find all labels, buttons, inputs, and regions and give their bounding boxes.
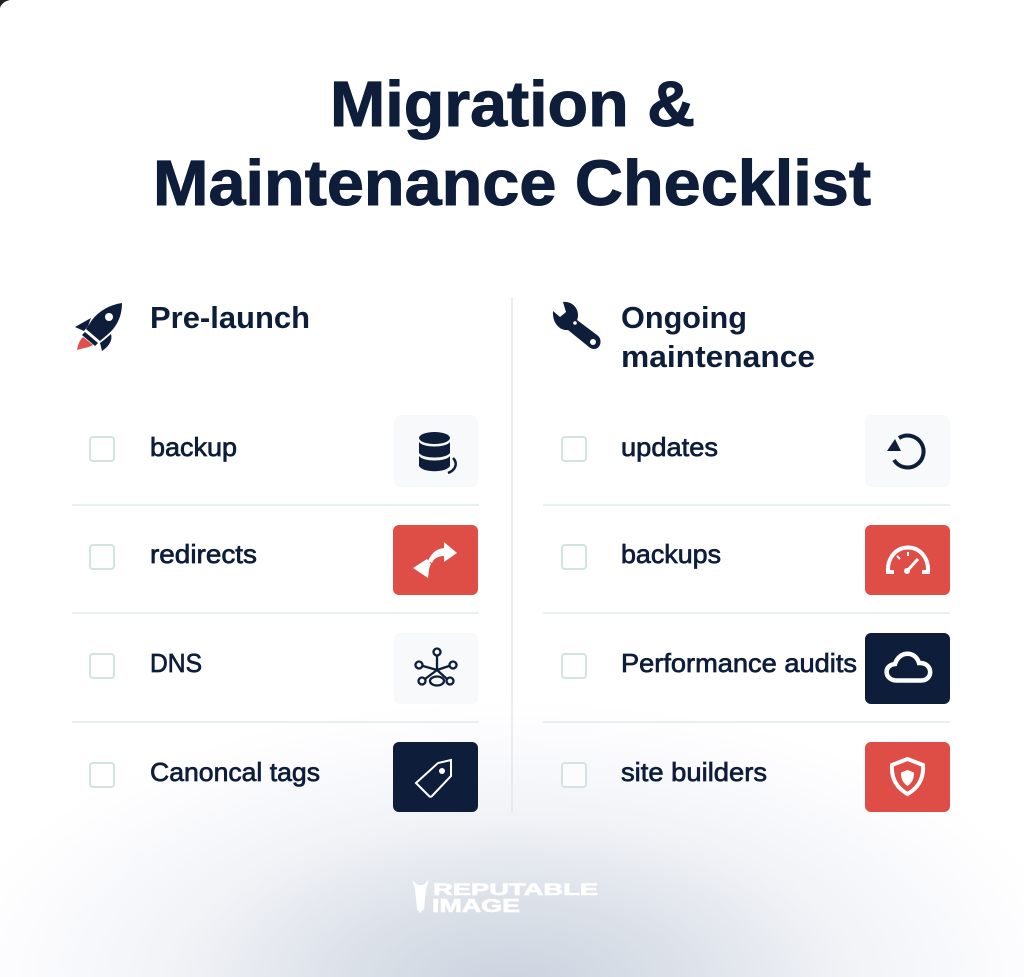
- row: updates: updates: [621, 432, 718, 462]
- icon: cloud: [887, 654, 930, 680]
- icon: shield: [892, 759, 923, 794]
- row: backup: backup: [150, 432, 237, 462]
- logo: reputable image: REPUTABLE: [433, 880, 598, 899]
- row: redirects: redirects: [150, 539, 257, 569]
- icon: refresh: [887, 436, 924, 468]
- title: Migration &: [330, 68, 695, 140]
- row: site builders: [562, 742, 950, 812]
- icon: network: [416, 648, 456, 686]
- panel: ongoing maintenance: [543, 300, 950, 812]
- row: updates: [562, 415, 950, 487]
- row: canoncal tags: Canoncal tags: [150, 757, 320, 787]
- row: canoncal tags: [90, 742, 478, 812]
- row: performance audits: [562, 633, 950, 704]
- heading: pre-launch: Pre-launch: [150, 300, 310, 335]
- icon: tag: [416, 760, 451, 797]
- logo: reputable image: IMAGE: [432, 896, 520, 916]
- row: backups: [562, 525, 950, 595]
- row: redirects: [90, 525, 478, 595]
- heading: ongoing maintenance: Ongoing: [621, 300, 747, 335]
- row: backup: [90, 415, 478, 487]
- heading: ongoing maintenance: [621, 300, 815, 374]
- title: [153, 68, 871, 219]
- row: performance audits: Performance audits: [621, 648, 857, 678]
- heading: ongoing maintenance: maintenance: [621, 339, 815, 374]
- icon: database: [419, 432, 456, 473]
- row: DNS: [90, 633, 478, 704]
- icon: gauge: [888, 548, 928, 574]
- row: DNS: DNS: [150, 648, 202, 678]
- icon: tie: [412, 880, 429, 913]
- row: backups: backups: [621, 539, 721, 569]
- icon: rocket: [75, 303, 122, 351]
- logo: reputable image: [412, 880, 598, 916]
- title: Maintenance Checklist: [153, 147, 871, 219]
- icon: wrench: [553, 302, 601, 349]
- row: site builders: site builders: [621, 757, 767, 787]
- panel: pre-launch: [72, 300, 479, 812]
- icon: redirect arrows: [413, 542, 457, 578]
